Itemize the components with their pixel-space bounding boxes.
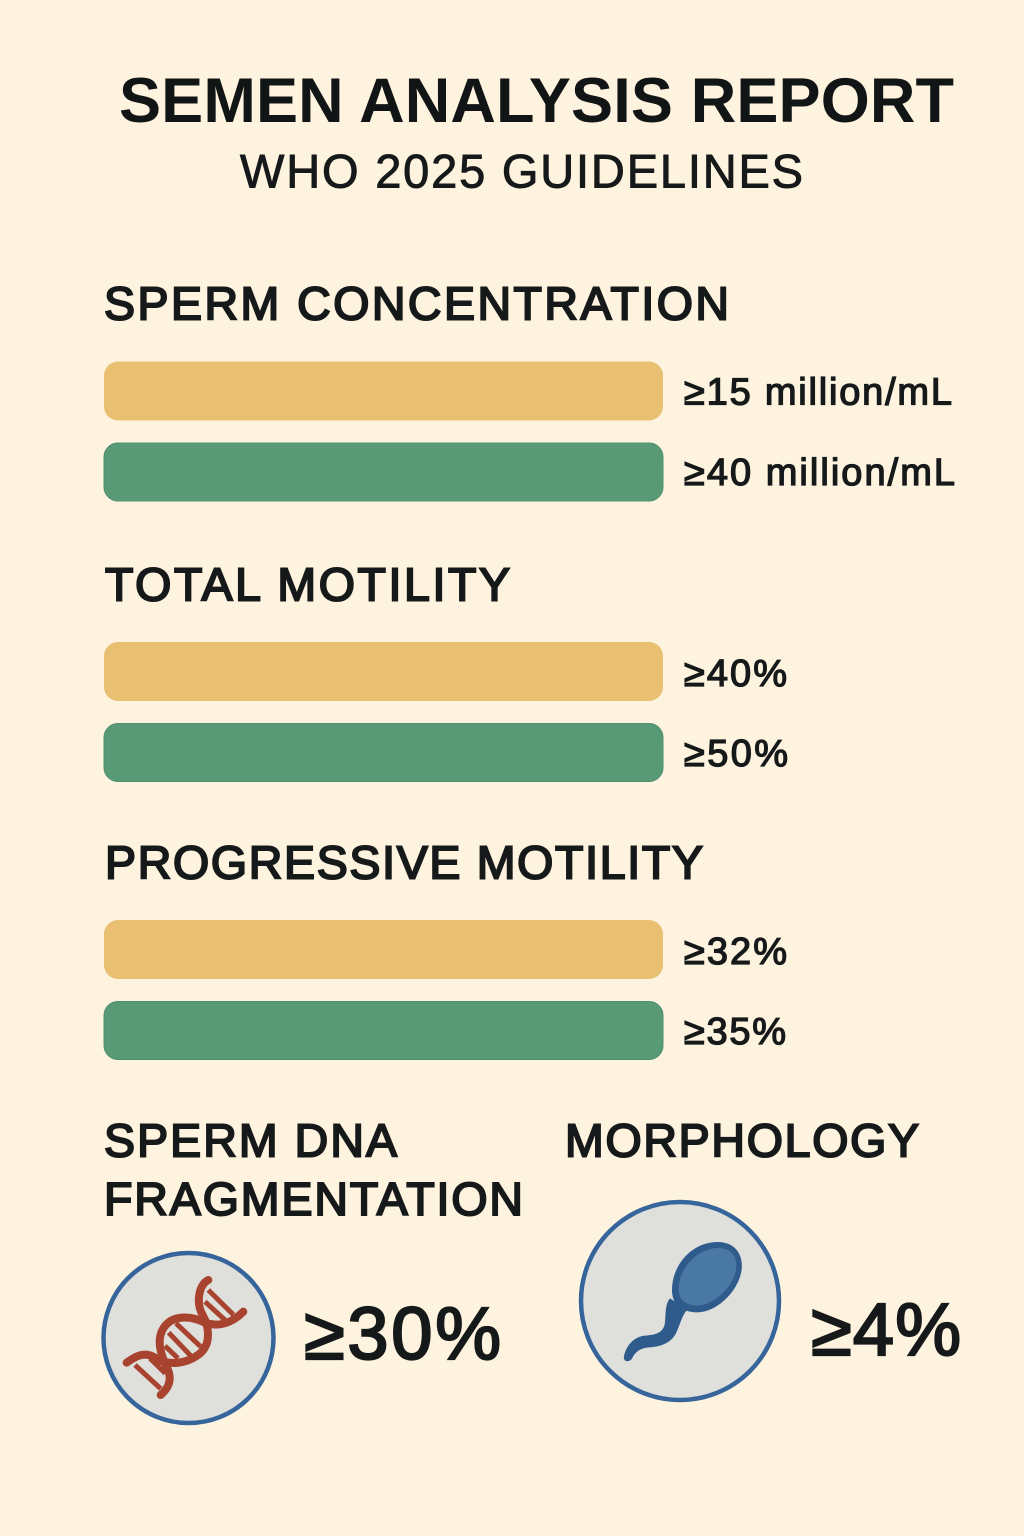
- icon: DNA helix: [104, 1253, 274, 1423]
- title: SEMEN ANALYSIS REPORT: [119, 66, 954, 136]
- value: 50 percent: ≥50%: [684, 733, 788, 775]
- bar: optimal reference: [104, 724, 663, 782]
- bar: optimal reference: [104, 443, 663, 501]
- heading: total motility: TOTAL MOTILITY: [105, 558, 510, 610]
- bar: lower reference: [104, 920, 663, 979]
- value: 35 percent: ≥35%: [684, 1011, 786, 1053]
- panel: morphology: [565, 1114, 961, 1400]
- value: 4 percent: ≥4%: [811, 1288, 961, 1371]
- heading: sperm DNA fragmentation: SPERM DNA: [104, 1114, 397, 1166]
- subtitle: WHO 2025 GUIDELINES: [240, 144, 803, 198]
- panel: sperm DNA fragmentation: [104, 1114, 523, 1423]
- value: 32 percent: ≥32%: [684, 931, 787, 973]
- value: 15 million: ≥15 million/mL: [684, 372, 952, 414]
- bar: lower reference: [104, 362, 663, 420]
- bar: lower reference: [104, 642, 663, 701]
- value: 40 percent: ≥40%: [684, 653, 787, 695]
- panel: sperm concentration: [104, 278, 955, 501]
- heading: morphology: MORPHOLOGY: [565, 1114, 919, 1166]
- icon: sperm cell: [581, 1202, 779, 1400]
- value: 30 percent: ≥30%: [304, 1292, 501, 1375]
- heading: progressive motility: PROGRESSIVE MOTILITY: [105, 836, 703, 888]
- bar: optimal reference: [104, 1002, 663, 1060]
- panel: progressive motility: [104, 836, 787, 1060]
- panel: total motility: [104, 558, 788, 782]
- heading: sperm concentration: SPERM CONCENTRATION: [104, 278, 729, 330]
- value: 40 million: ≥40 million/mL: [684, 452, 955, 494]
- heading line two: FRAGMENTATION: [104, 1173, 523, 1225]
